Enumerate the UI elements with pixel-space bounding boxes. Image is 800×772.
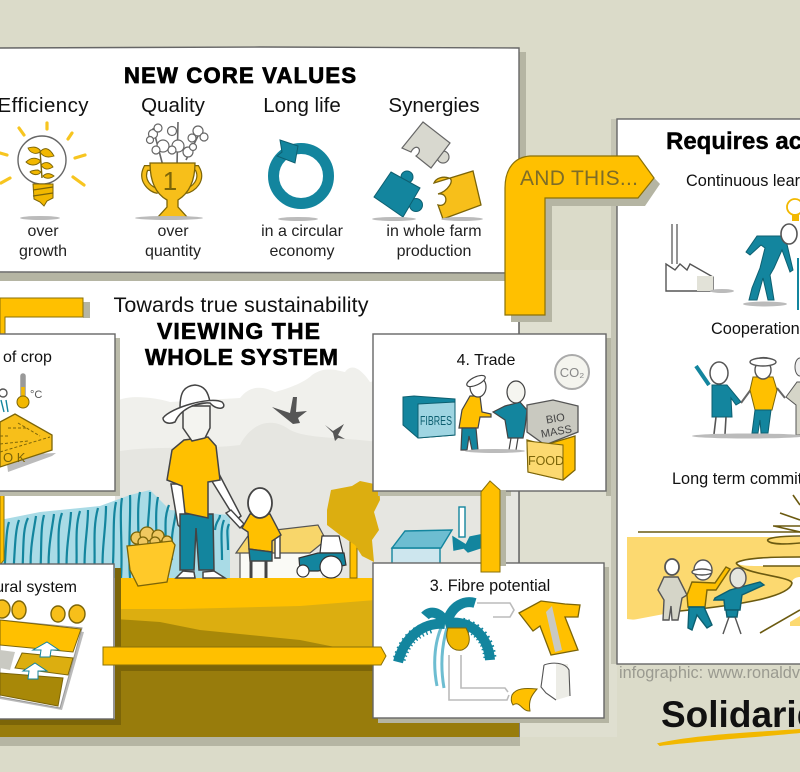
trees [0,600,85,623]
illustration: child [226,488,281,578]
column: quality: 1 [163,166,177,196]
illustration: tractor [297,536,346,578]
person: trader woman [493,381,527,450]
section: long term commitment [627,470,800,640]
column: synergies [372,94,483,260]
section: cooperation [692,320,800,438]
column: long life: in a circular [261,223,344,240]
heading: towards true sustainability [114,293,369,370]
grey puzzle [402,122,450,168]
panel: new core values [0,47,526,281]
column: quality: Quality [141,94,206,117]
box: biomass: BIO [545,411,566,427]
panel: requires action [611,119,800,664]
arrow: left vertical [0,482,4,565]
icon: thermometer: °C [30,389,42,401]
icon: co2: CO₂ [560,365,584,380]
icon: banana [511,689,537,711]
column: long life: Long life [263,94,341,117]
white arrows [33,642,59,657]
icon: face [541,663,570,700]
box: fibres [403,396,455,438]
icon: birds [272,397,345,441]
grey connectors [449,603,514,700]
icon: palm tree [398,602,490,688]
land block [0,622,84,710]
column: quality [135,94,208,260]
icon: bulb [787,199,800,215]
arrow: and this [505,156,660,322]
box: biomass: MASS [540,423,573,441]
icon: thermometer [17,376,42,408]
panel: crop box [0,334,120,496]
section: continuous learning [666,172,800,310]
panel: 3 fibre potential [373,563,609,723]
panel: crop box: of crop [3,349,52,366]
yellow puzzle [434,171,481,219]
soil block [0,414,56,472]
soil block: O K [3,450,26,465]
panel: agricultural system box [0,564,121,725]
person middle [741,358,785,433]
column: efficiency: growth [19,243,67,260]
icon: factory [672,224,677,264]
person left [696,362,741,434]
illustration: tree [327,481,380,578]
teal grass field [0,490,230,578]
arrow: horizontal ground [103,647,386,665]
column: quality: over [157,223,189,240]
box: food [527,436,575,480]
column: synergies: Synergies [388,94,480,117]
column: efficiency [0,94,89,260]
winding road [627,577,800,640]
panel: 4 trade: 4. Trade [457,352,515,369]
box: biomass [527,400,578,445]
ground layers [0,578,519,737]
column: long life: economy [270,243,334,260]
column: synergies: production [397,243,471,260]
column: long life [261,94,344,260]
heading: towards true sustainability: WHOLE SYSTEM [145,344,338,370]
person right [786,358,800,435]
column: efficiency: over [27,223,59,240]
person teal suit [746,224,797,300]
panel: 4 trade [373,334,611,496]
panel: whole system scene [0,273,520,746]
grey hills background [115,367,518,578]
illustration: farmhouse [236,525,326,578]
teal puzzle [374,171,422,217]
section: cooperation: Cooperation [711,320,800,338]
icon: shirt [519,601,580,655]
person: trader man [459,373,491,450]
yellow band [627,537,800,625]
box: fibres: FIBRES [420,413,452,428]
arrow: top left L [0,298,90,342]
icon: rain cloud [0,389,8,412]
column: efficiency: Efficiency [0,94,89,117]
column: quality: quantity [145,243,201,260]
panel: 3 fibre potential: 3. Fibre potential [430,577,550,595]
arrow: fibre to trade [481,481,506,572]
illustration: farmer [163,385,241,578]
arrow: and this: AND THIS... [520,167,638,190]
box: food: FOOD [528,454,564,468]
heading: towards true sustainability: VIEWING THE [157,318,320,344]
heading: towards true sustainability: Towards true sustainability [114,293,369,317]
illustration: basket [127,527,175,586]
people group [658,559,764,634]
title: NEW CORE VALUES [124,63,356,88]
icon: co2 [555,355,589,389]
column: synergies: in whole farm [386,223,482,240]
illustration: factory behind [392,507,480,564]
